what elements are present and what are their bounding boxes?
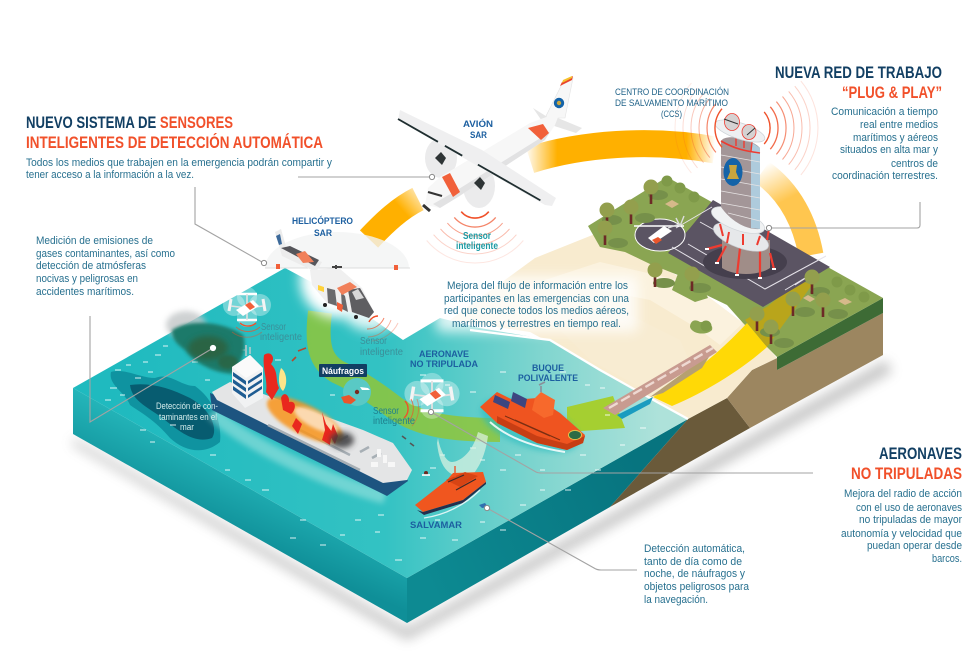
label: helicóptero SAR xyxy=(292,215,353,239)
label: buque polivalente: POLIVALENTE xyxy=(518,373,579,384)
heading: nuevo sistema xyxy=(26,113,323,152)
text: information flow: participantes en las emergencias con una xyxy=(444,293,629,305)
propeller discs xyxy=(425,138,457,178)
salvamar xyxy=(415,466,486,518)
surface foam xyxy=(105,340,646,560)
heading: nuevo sistema: NUEVO SISTEMA DE SENSORES xyxy=(26,113,233,132)
fire xyxy=(261,353,354,452)
label: aeronave no tripulada: AERONAVE xyxy=(419,349,470,360)
leader line: automatic detection xyxy=(484,505,637,570)
label: CCS: (CCS) xyxy=(661,109,682,120)
Arc: plane to control centre xyxy=(530,144,715,160)
text: real time communication: centros de xyxy=(891,158,938,170)
heading: plug and play: “PLUG & PLAY” xyxy=(842,83,942,102)
text: range improvement: autonomía y velocidad que xyxy=(841,528,962,540)
deck xyxy=(212,382,412,483)
fuselage stripes xyxy=(442,173,460,197)
parked helicopter xyxy=(634,216,684,244)
grass side face xyxy=(777,298,883,370)
rotor disc xyxy=(265,232,409,268)
text: range improvement: barcos. xyxy=(932,553,962,565)
text: real time communication: coordinación terrestres. xyxy=(832,170,938,182)
smoke and contaminants xyxy=(166,311,245,374)
text: shared information xyxy=(26,157,333,181)
wake around tanker xyxy=(212,412,385,497)
text: information flow: Mejora del flujo de información entre los xyxy=(447,280,629,292)
tarmac with heliport xyxy=(634,200,830,307)
label: sensor on aeronave xyxy=(373,406,416,427)
tower legs xyxy=(705,245,776,278)
tower signal waves xyxy=(675,81,818,175)
cockpit xyxy=(428,192,442,196)
label: contaminants: taminantes en el xyxy=(159,412,217,423)
label: contaminants: Detección de con- xyxy=(156,401,218,412)
label: náufragos: Náufragos xyxy=(322,366,364,377)
heading: aeronaves no tripuladas xyxy=(851,444,962,483)
label: sensor on drone: inteligente xyxy=(260,332,303,343)
upper ring xyxy=(708,201,768,239)
text: information flow: red que conecte todos los medios aéreos, xyxy=(444,305,629,317)
plane xyxy=(398,76,582,211)
salvage beams below drone xyxy=(437,432,488,478)
label: CCS xyxy=(615,87,729,120)
white fade behind helicopter xyxy=(300,242,398,331)
tower shaft xyxy=(721,137,760,229)
oil slick xyxy=(111,371,220,450)
wing xyxy=(398,110,556,206)
tower base xyxy=(722,240,770,274)
text: automatic detection: la navegación. xyxy=(644,594,708,606)
leader line: plane xyxy=(298,174,435,180)
drone sensor waves xyxy=(232,316,419,426)
drone near buque xyxy=(404,373,460,419)
tail fin xyxy=(545,78,573,118)
contaminant cloud xyxy=(172,323,245,374)
top red rim xyxy=(721,141,760,153)
sea left side face xyxy=(73,388,407,623)
text: gas emissions: gases contaminantes, así como xyxy=(36,248,175,260)
text: information flow: marítimos y terrestres en tiempo real. xyxy=(452,318,621,330)
text: real time communication: Comunicación a tiempo xyxy=(831,106,938,118)
tower shadow xyxy=(703,245,787,279)
sea right side face xyxy=(407,419,688,623)
drone over smoke xyxy=(223,287,271,327)
label: sensor on drone xyxy=(260,322,303,343)
label: avión SAR: AVIÓN xyxy=(463,118,493,130)
text: real time communication: marítimos y aéreos xyxy=(853,132,939,144)
control tower (CCS) xyxy=(675,81,818,279)
terrain block: sea, beach and land xyxy=(73,177,883,623)
trees and crates xyxy=(598,176,870,348)
text: gas emissions: Medición de emisiones de xyxy=(36,235,153,247)
small inflatable with person xyxy=(479,503,488,508)
shoreline foam xyxy=(470,330,688,419)
text: shared information: tener acceso a la información a la vez. xyxy=(26,169,194,181)
label: sensor on plane xyxy=(456,231,498,252)
label: aeronave no tripulada: NO TRIPULADA xyxy=(410,359,478,370)
tail xyxy=(275,229,322,272)
label: sensor on drone: Sensor xyxy=(261,322,287,333)
label: buque polivalente: BUQUE xyxy=(532,363,565,374)
label: helicóptero SAR: HELICÓPTERO xyxy=(292,215,353,227)
tail plane xyxy=(533,108,582,133)
text: range improvement: Mejora del radio de acción xyxy=(844,488,962,500)
label: sensor on helicopter: Sensor xyxy=(360,336,388,347)
leader line: drone xyxy=(428,409,813,473)
text: automatic detection: objetos peligrosos para xyxy=(644,581,749,593)
castaways xyxy=(292,348,430,475)
label: CCS: CENTRO DE COORDINACIÓN xyxy=(615,87,729,98)
plane signal waves xyxy=(427,212,523,263)
bridge tower xyxy=(232,355,263,408)
lower ring xyxy=(710,217,772,257)
helicopter xyxy=(265,229,410,319)
label: buque polivalente xyxy=(518,363,579,384)
text: gas emissions: accidentes marítimos. xyxy=(36,286,134,298)
text: gas emissions xyxy=(36,235,175,298)
buque polivalente xyxy=(474,382,586,463)
label: helicóptero SAR: SAR xyxy=(314,228,332,239)
pier xyxy=(603,345,717,419)
dark soil face xyxy=(610,398,750,507)
leader line: helicopter xyxy=(195,187,267,266)
label: avión SAR xyxy=(463,118,493,141)
text: automatic detection: tanto de día como de xyxy=(644,556,742,568)
sea surface xyxy=(73,268,688,578)
label: sensor on helicopter xyxy=(360,336,404,358)
body xyxy=(310,268,374,318)
radar dishes xyxy=(724,114,740,130)
label: contaminants xyxy=(156,401,218,433)
soil face xyxy=(727,313,883,428)
text: real time communication: situados en alta mar y xyxy=(840,144,939,156)
shadow under terrain block xyxy=(73,360,892,640)
heading: plug and play xyxy=(775,63,942,102)
text: range improvement: puedan operar desde xyxy=(867,540,962,552)
heading: nuevo sistema: INTELIGENTES DE DETECCIÓN AUTOMÁTICA xyxy=(26,133,323,152)
text: range improvement: con el uso de aeronaves xyxy=(856,502,963,514)
label: contaminants: mar xyxy=(180,422,195,433)
white glow behind centre text xyxy=(436,276,638,332)
Arc: control centre to land xyxy=(762,172,811,255)
Band: olive across grass xyxy=(745,280,812,347)
Band: yellow across beach xyxy=(653,323,767,406)
hull xyxy=(210,393,408,496)
label: salvamar: SALVAMAR xyxy=(410,520,462,531)
text: gas emissions: detección de atmósferas xyxy=(36,260,147,272)
label: sensor on aeronave: inteligente xyxy=(373,416,416,427)
top platform xyxy=(713,115,767,147)
lime signal band from helicopter through castaways xyxy=(319,312,625,432)
text: shared information: Todos los medios que trabajen en la emergencia podrán compartir y xyxy=(26,157,333,169)
label: sensor on plane: inteligente xyxy=(456,241,498,252)
tanker ship xyxy=(210,345,412,496)
text: information flow xyxy=(444,280,629,330)
text: real time communication xyxy=(831,106,939,182)
label: sensor on plane: Sensor xyxy=(463,231,491,242)
beach sand xyxy=(450,232,777,419)
text: gas emissions: nocivas y peligrosas en xyxy=(36,273,138,285)
text: automatic detection xyxy=(644,543,749,606)
label: avión SAR: SAR xyxy=(470,130,487,141)
engines xyxy=(435,152,446,165)
text: real time communication: real entre medios xyxy=(860,119,939,131)
text: automatic detection: noche, de náufragos y xyxy=(644,568,746,580)
label: CCS: DE SALVAMENTO MARÍTIMO xyxy=(615,98,728,109)
label: sensor on aeronave: Sensor xyxy=(373,406,400,417)
leader line: tower xyxy=(766,202,920,231)
ring struts xyxy=(720,224,769,245)
grey cloud xyxy=(166,311,206,339)
label: aeronave no tripulada xyxy=(410,349,478,370)
tower emblem xyxy=(724,158,742,186)
label: sensor on helicopter: inteligente xyxy=(360,347,404,358)
text: range improvement xyxy=(841,488,963,565)
text: range improvement: no tripuladas de mayor xyxy=(859,514,962,526)
Arc: helicopter to plane xyxy=(369,199,418,239)
grass land xyxy=(588,177,883,357)
fuselage xyxy=(425,112,560,208)
text: automatic detection: Detección automática, xyxy=(644,543,745,555)
dish struts xyxy=(736,135,752,151)
leader line: gas emissions xyxy=(90,316,216,422)
